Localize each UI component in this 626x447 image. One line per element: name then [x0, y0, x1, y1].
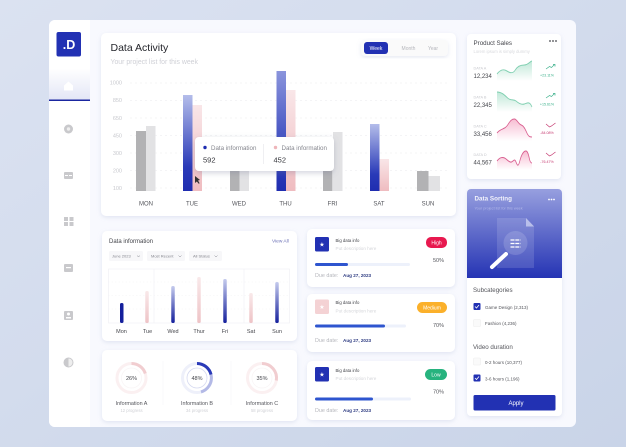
thin bar chart: [108, 269, 290, 323]
video duration filter: [473, 344, 523, 382]
row: data c: -84.08%: [540, 131, 554, 135]
menu dots: [549, 40, 557, 42]
task card: low: Aug 27, 2023: [343, 408, 372, 413]
badge: medium: [417, 302, 447, 313]
icon: card: [64, 172, 73, 179]
ring B: 48%: [191, 376, 203, 382]
ring C: [246, 364, 278, 413]
badge: medium: Medium: [423, 306, 441, 312]
x axis labels: MON: [139, 202, 153, 208]
period toggle: Week: [370, 46, 383, 52]
header: Your project list for this week: [474, 206, 523, 210]
row: data a: DATA A: [474, 66, 487, 70]
subcategories filter: Subcategories: [473, 287, 513, 294]
row: data c: 33,456: [474, 132, 493, 138]
icon: star badge: [315, 367, 329, 382]
subtitle: Your project list for this week: [110, 59, 199, 66]
ring B: 34 progress: [186, 408, 208, 413]
ring A: 12 progress: [120, 408, 143, 413]
logo: [56, 32, 81, 56]
video duration filter: 0-2 hours (10,377): [485, 360, 523, 365]
day labels: Wed: [167, 329, 179, 335]
ring C: 58 progress: [251, 408, 273, 413]
y axis labels: 850: [113, 98, 122, 104]
panel: data activity: [101, 33, 456, 216]
day labels: Mon: [116, 329, 127, 335]
day labels: Sun: [272, 329, 282, 335]
task card: medium: Put description here: [336, 308, 377, 314]
badge: high: High: [431, 240, 442, 246]
bar chart: weekly activity: [136, 71, 440, 191]
row: data a: +23.11%: [540, 74, 555, 78]
panel: data information: Data information: [109, 239, 153, 245]
header: [467, 189, 562, 278]
panel: product sales: [467, 34, 561, 179]
sidebar: [49, 32, 90, 367]
icon: archive: [64, 264, 73, 272]
panel: product sales: Lorem ipsum is simply dummy: [474, 49, 531, 54]
ring A: Information A: [116, 401, 148, 407]
row: data b: DATA B: [474, 96, 487, 100]
task card: medium: 70%: [433, 323, 444, 329]
panel: data information: [102, 231, 297, 341]
x axis labels: [139, 202, 434, 208]
ring B: [181, 364, 213, 413]
row: data c: DATA C: [474, 124, 487, 128]
day labels: [116, 329, 282, 335]
y axis labels: 1000: [110, 80, 122, 86]
panel: data sorting: [467, 189, 562, 416]
row: data a: [474, 61, 555, 81]
x axis labels: WED: [232, 202, 247, 208]
icon: target: [64, 124, 73, 134]
icon: star badge: ★: [319, 372, 325, 378]
row: data d: 44,567: [474, 160, 493, 166]
period toggle: Year: [428, 46, 438, 52]
y axis labels: 200: [113, 168, 122, 174]
ring C: 35%: [256, 376, 268, 382]
subcategories filter: Game Design (2,313): [485, 305, 529, 310]
apply button: [474, 395, 556, 410]
row: data a: 12,234: [474, 74, 493, 80]
y axis labels: 650: [113, 116, 122, 122]
day labels: Fri: [222, 329, 228, 335]
filter dropdowns: All Status: [193, 254, 210, 258]
task card: low: Due date:: [315, 408, 338, 414]
apply button: Apply: [508, 401, 524, 407]
task card: low: Put description here: [336, 376, 377, 381]
ring B: Information B: [181, 401, 213, 407]
x axis labels: FRI: [328, 202, 338, 208]
video duration filter: 3-6 hours (1,196): [485, 376, 520, 382]
task card: high: Due date:: [315, 273, 338, 279]
task card: medium: [307, 294, 455, 352]
task card: high: [307, 229, 455, 287]
day labels: Sat: [247, 329, 256, 335]
badge: high: [426, 237, 447, 248]
logo: .D: [63, 38, 75, 52]
filter dropdowns: June 2023: [112, 254, 131, 258]
subcategories filter: Fashion (4,236): [485, 321, 517, 326]
ring C: Information C: [246, 401, 278, 407]
task card: high: 50%: [433, 258, 444, 264]
x axis labels: TUE: [186, 202, 198, 208]
tooltip: Data information: [211, 145, 257, 152]
day labels: Thur: [193, 329, 205, 335]
icon: grid: [64, 217, 74, 226]
dashboard window: [49, 20, 576, 427]
row: data c: [474, 119, 556, 141]
badge: low: [425, 369, 447, 380]
row: data d: DATA D: [474, 153, 487, 157]
row: data d: [474, 151, 556, 170]
icon: star badge: [315, 300, 329, 314]
heading: Data Activity: [110, 42, 169, 54]
tooltip: Data information: [282, 145, 327, 152]
filter dropdowns: [109, 251, 222, 261]
x axis labels: THU: [279, 202, 292, 208]
row: data b: +15.61%: [540, 102, 555, 106]
icon: contact: [64, 311, 73, 320]
active nav item: home: [49, 68, 90, 101]
task card: high: Big data info: [336, 238, 360, 243]
icon: contrast: [64, 358, 73, 367]
day labels: Tue: [143, 329, 152, 335]
y axis labels: [110, 80, 122, 192]
tooltip: [195, 137, 334, 171]
progress bar: [315, 263, 410, 266]
icon: star badge: ★: [319, 242, 325, 248]
row: data b: [474, 92, 555, 112]
y axis labels: 450: [113, 134, 122, 140]
task card: low: Big data info: [336, 368, 360, 373]
ring A: [116, 364, 148, 413]
tooltip: 452: [274, 156, 286, 164]
panel: data information: View All: [272, 238, 289, 244]
task card: low: [307, 361, 455, 420]
panel: product sales: Product Sales: [474, 40, 512, 47]
header: Data Sorting: [474, 196, 512, 202]
progress bar: [315, 324, 406, 328]
task card: medium: Due date:: [315, 338, 338, 344]
task card: high: Aug 27, 2023: [343, 273, 372, 278]
row: data b: 22,345: [474, 103, 493, 109]
x axis labels: SUN: [422, 202, 434, 208]
task card: medium: Big data info: [336, 300, 360, 305]
period toggle: Month: [402, 46, 416, 52]
icon: star badge: [315, 237, 329, 252]
task card: low: 70%: [433, 390, 444, 396]
icon: document with magnifier: [492, 218, 534, 268]
cursor: [195, 176, 200, 184]
x axis labels: SAT: [373, 202, 385, 208]
tooltip: 592: [203, 156, 216, 164]
icon: star badge: ★: [319, 304, 325, 311]
y axis labels: 300: [113, 151, 122, 157]
filter dropdowns: Most Recent: [151, 254, 174, 258]
task card: medium: Aug 27, 2023: [343, 338, 372, 343]
subcategories filter: [473, 287, 529, 326]
progress bar: [315, 398, 411, 400]
ring A: 26%: [126, 376, 137, 382]
badge: low: Low: [431, 372, 441, 378]
task card: high: Put description here: [336, 246, 377, 251]
video duration filter: Video duration: [473, 344, 513, 351]
period toggle: [361, 40, 448, 56]
row: data d: -76.47%: [540, 160, 554, 164]
panel: progress rings: [102, 350, 297, 421]
y axis labels: 100: [113, 186, 122, 192]
